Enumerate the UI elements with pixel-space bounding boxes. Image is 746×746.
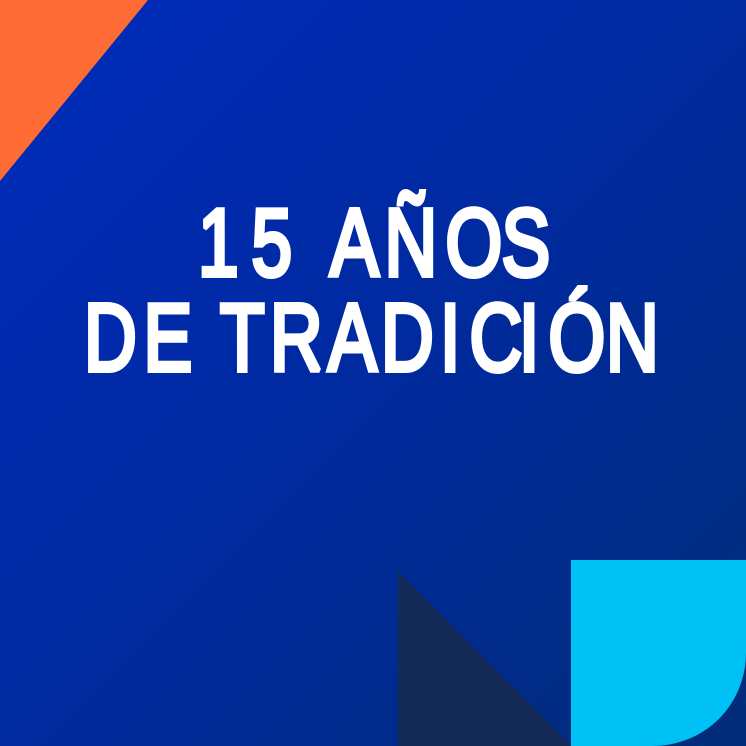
title line 1: 15AÑOS [198, 190, 550, 297]
cyan rounded square [571, 560, 746, 746]
title line 2: DETRADICIÓN [84, 285, 659, 392]
orange corner triangle [0, 0, 148, 181]
title: 15 años de tradición [84, 190, 659, 392]
dark navy triangle [398, 571, 571, 746]
